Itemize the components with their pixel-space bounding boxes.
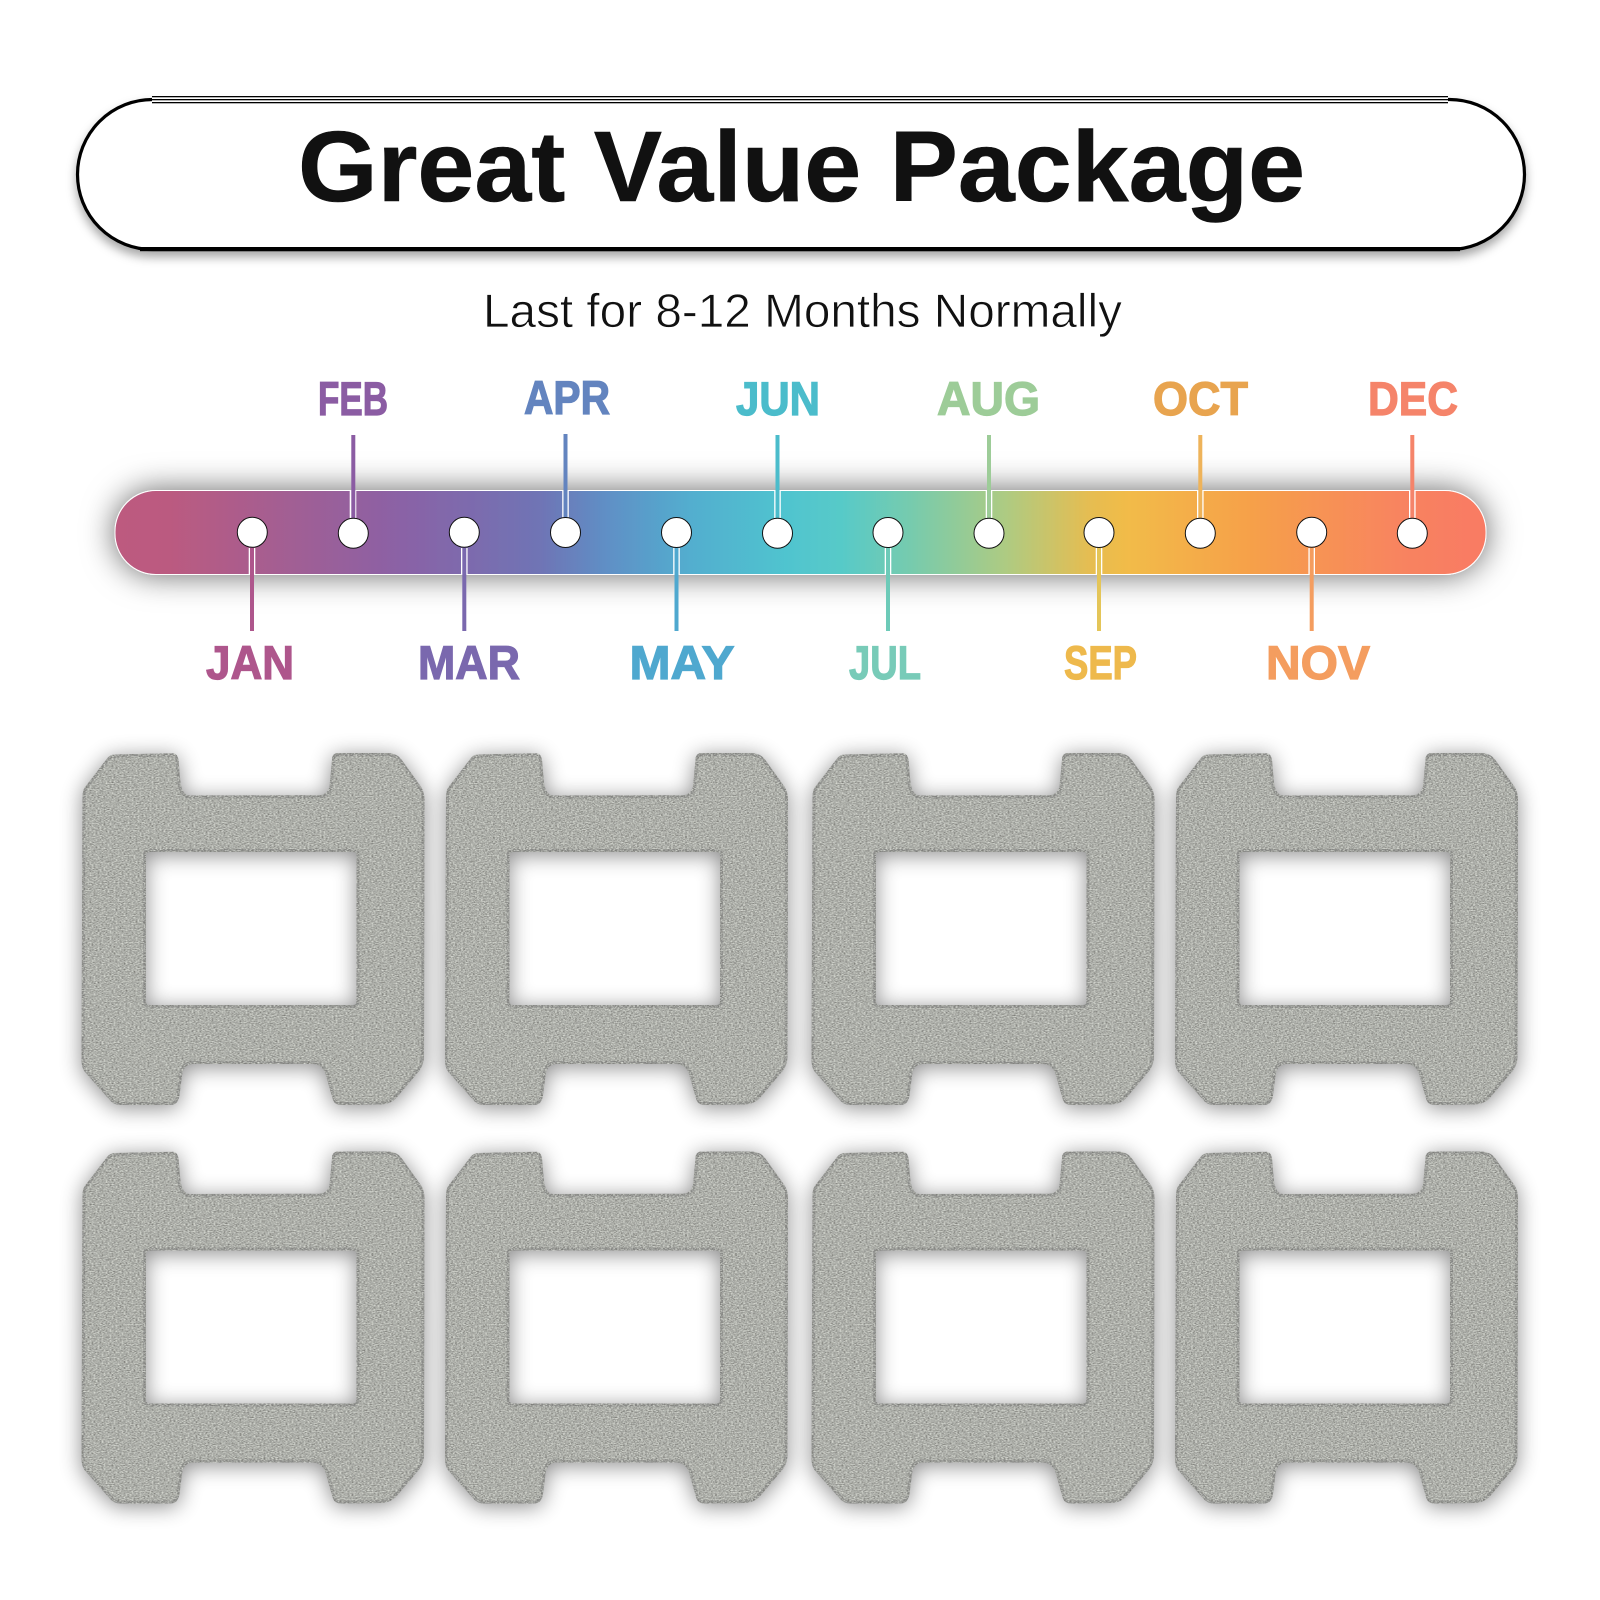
twelve month timeline [115, 371, 1486, 689]
month: JUN: JUN [736, 372, 820, 425]
month: JUL [849, 518, 921, 689]
month: MAY: MAY [630, 636, 734, 689]
month: FEB: FEB [318, 372, 388, 425]
month: NOV [1266, 517, 1371, 689]
gradient bar [115, 490, 1486, 574]
month: MAY [630, 518, 734, 689]
pad row 1 column 2 [446, 754, 786, 1104]
pill outline [78, 100, 1524, 250]
month: AUG [937, 372, 1040, 548]
month: SEP: SEP [1064, 636, 1137, 689]
pad row 2 column 3 [813, 1153, 1153, 1502]
month: OCT: OCT [1153, 372, 1248, 425]
cleaning pads grid [83, 754, 1516, 1502]
pad row 1 column 4 [1176, 754, 1516, 1104]
month: APR [524, 371, 610, 548]
month: DEC [1368, 372, 1458, 548]
pad row 2 column 2 [446, 1153, 786, 1502]
pad row 2 column 4 [1176, 1153, 1516, 1502]
month: APR: APR [524, 371, 610, 424]
month: JUL: JUL [849, 636, 921, 689]
month: JAN [206, 517, 294, 689]
month: NOV: NOV [1266, 636, 1371, 689]
month: JAN: JAN [206, 636, 294, 689]
pill bottom edge [140, 247, 1460, 251]
pad row 2 column 1 [83, 1153, 423, 1502]
month: SEP [1064, 518, 1137, 689]
month: FEB [318, 372, 388, 548]
month: MAR [418, 517, 520, 689]
pad row 1 column 3 [813, 754, 1153, 1104]
pill top rule lines [152, 95, 1448, 105]
month: JUN [736, 372, 820, 548]
title pill [78, 95, 1524, 251]
pad row 1 column 1 [83, 754, 423, 1104]
title: Great Value Package [298, 111, 1305, 223]
subtitle: Last for 8-12 Months Normally [483, 284, 1122, 337]
month: MAR: MAR [418, 636, 520, 689]
month: OCT [1153, 372, 1248, 548]
month: AUG: AUG [937, 372, 1040, 425]
month: DEC: DEC [1368, 372, 1458, 425]
